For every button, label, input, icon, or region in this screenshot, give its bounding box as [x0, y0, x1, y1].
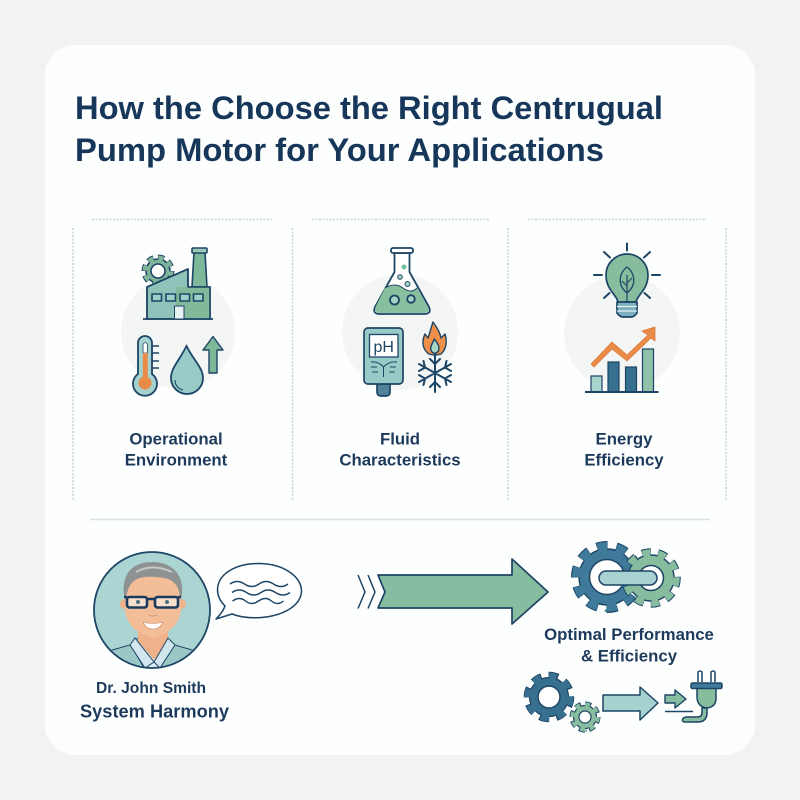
- label: operational environment: Operational: [129, 430, 223, 448]
- label: energy efficiency: Efficiency: [584, 450, 664, 470]
- panel: energy efficiency: [564, 244, 680, 470]
- label: fluid characteristics: Characteristics: [339, 450, 461, 470]
- arrow: rising trend: [591, 327, 655, 367]
- label: operational environment: Environment: [125, 450, 228, 470]
- icon: small gear: [572, 704, 598, 730]
- panel: main card: [45, 45, 755, 755]
- icon: thermometer: [133, 336, 159, 396]
- label: fluid characteristics: [339, 430, 461, 470]
- icon: factory with gear: [143, 248, 213, 319]
- arrow: flow to outcome: [358, 559, 548, 624]
- title: [75, 90, 663, 168]
- icon: light bulb with leaf: [594, 244, 660, 317]
- icon: pH meter: pH: [373, 339, 394, 356]
- icon: flask: [374, 248, 430, 314]
- title: Pump Motor for Your Applications: [75, 132, 604, 168]
- label: optimal performance: & Efficiency: [581, 646, 678, 666]
- icon: large gear: [528, 676, 570, 718]
- role label: System Harmony: [80, 700, 230, 722]
- icon: up arrow: [203, 336, 223, 373]
- speech bubble: [216, 564, 302, 619]
- label: optimal performance: Optimal Performance: [544, 625, 714, 644]
- label: energy efficiency: Energy: [596, 430, 653, 448]
- icon: pH meter: [364, 328, 403, 396]
- portrait: Dr. John Smith: [94, 552, 210, 675]
- label: fluid characteristics: Fluid: [380, 430, 420, 448]
- icon: flame: [423, 322, 446, 355]
- name label: Dr. John Smith: [96, 680, 206, 697]
- label: energy efficiency: [584, 430, 664, 470]
- arrow: small input: [665, 690, 693, 712]
- icon: linked gears: [576, 546, 676, 608]
- icon: water drop: [171, 346, 203, 394]
- label: optimal performance: [544, 625, 714, 666]
- chart: rising bars: [585, 349, 658, 392]
- label: operational environment: [125, 430, 228, 470]
- panel: operational environment: [121, 248, 235, 470]
- icon: snowflake: [419, 355, 451, 392]
- icon: electric plug: [682, 671, 722, 722]
- panel: fluid characteristics: [339, 248, 461, 470]
- arrow: power flow: [603, 687, 658, 720]
- title: How the Choose the Right Centrugual: [75, 90, 663, 126]
